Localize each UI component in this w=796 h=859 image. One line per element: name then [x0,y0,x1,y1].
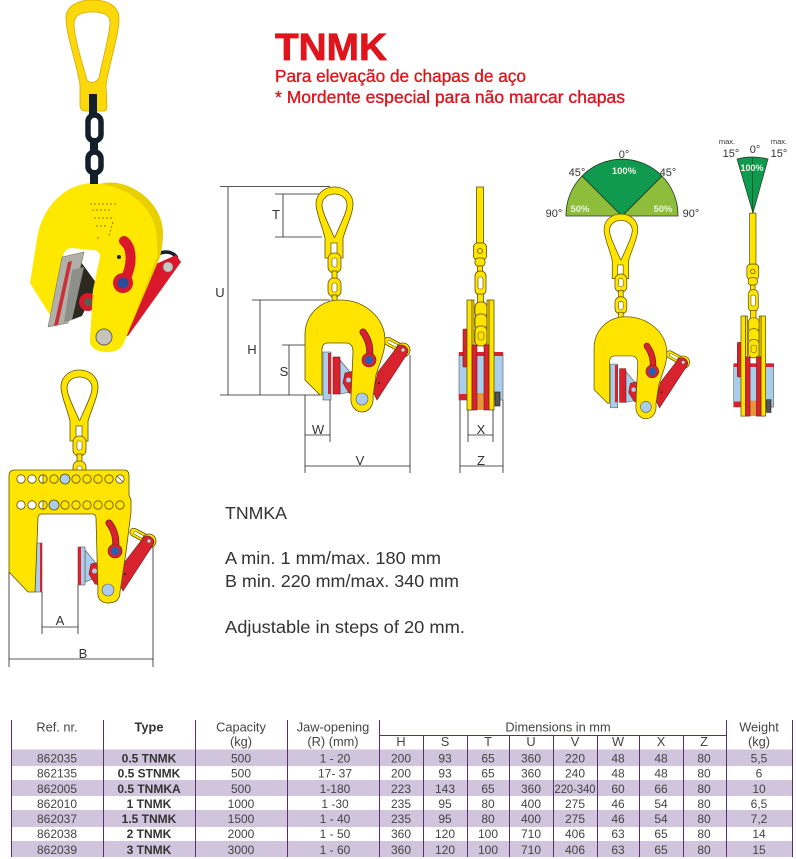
row 862039 [37,843,766,857]
diagram: TNMKA adjustable clamp [9,370,156,667]
table header: H [396,734,406,749]
table header: Weight [739,720,779,734]
row 862037: 275 [565,812,585,826]
row 862010: 1 -30 [321,797,349,811]
table header: Dimensions in mm [505,720,611,734]
table header: S [441,734,449,749]
labels: B [79,646,87,661]
row 862135: 6 [756,766,763,780]
row 862135: 240 [565,766,585,780]
row 862039: 100 [478,843,498,857]
row 862038: 100 [478,827,498,841]
percentages: 50% [570,204,590,215]
rear mechanism [343,336,410,400]
table header: Z [700,734,708,749]
row 862010 [37,797,768,811]
row 862135: 65 [481,766,495,780]
row 862039: 3000 [228,843,255,857]
table header: Ref. nr. [36,720,78,734]
row 862035: 48 [611,752,625,766]
angle labels: 0° [619,149,629,161]
row 862037: 80 [481,812,495,826]
row 862038: 360 [391,827,411,841]
row 862035 [37,752,768,766]
row 862135: 862135 [37,766,77,780]
table header: U [526,734,536,749]
row 862135 [37,766,763,780]
angle labels: 15° [723,148,739,160]
row 862037: 54 [654,812,668,826]
text block: TNMKA specifications: TNMKA [225,503,287,523]
dimension lines: X Z [460,400,503,473]
row 862035: 80 [697,752,711,766]
row 862039: 15 [752,843,766,857]
diagram: dimensioned clamp front view [215,186,410,473]
row 862010: 862010 [37,797,77,811]
labels [215,207,365,468]
labels: X [477,422,486,437]
table header: X [657,734,666,749]
row 862135: 360 [521,766,541,780]
title: TNMK [275,27,388,69]
row 862039: 360 [391,843,411,857]
lever and pin [102,523,122,596]
row 862035: 360 [521,752,541,766]
jaw pads [35,543,95,592]
photo: red arm [122,252,181,336]
table header: (R) (mm) [307,734,359,749]
percentage: 100% [740,163,764,173]
row 862005: 862005 [37,782,77,796]
row stripes [11,750,792,857]
row 862038: 14 [752,827,766,841]
labels: U [215,285,225,300]
row 862038: 2000 [228,827,255,841]
angle labels [719,137,787,160]
dark green sector [582,159,662,216]
row 862005: 60 [611,782,625,796]
labels: W [312,422,325,437]
row 862037: 95 [438,812,452,826]
angle labels: max. [719,137,735,146]
row 862038: 862038 [37,827,77,841]
row 862135: 48 [611,766,625,780]
row 862037: 400 [521,812,541,826]
row 862005: 0.5 TNMKA [117,782,181,796]
photo: chain [88,94,101,184]
row 862039: 1 - 60 [320,843,351,857]
table header: T [484,734,492,749]
row 862035: 500 [231,752,251,766]
adjustable body [9,470,131,603]
row 862037: 7,2 [751,812,768,826]
row 862037: 1 - 40 [320,812,351,826]
photo: shackle [66,0,119,111]
photo: lever and pin [96,241,133,345]
row 862010: 400 [521,797,541,811]
jaw pads [323,352,350,400]
table header: Capacity [216,720,266,734]
row 862005: 500 [231,782,251,796]
row 862010: 1 TNMK [127,797,172,811]
angle labels: 45° [660,167,676,179]
row 862010: 95 [438,797,452,811]
row 862010: 275 [565,797,585,811]
table header: Type [135,720,163,734]
diagram: clamp at angle, side view [734,213,774,416]
row 862135: 80 [697,766,711,780]
text block: TNMKA specifications [225,503,465,637]
rear mechanism [89,527,156,591]
row 862035: 65 [481,752,495,766]
row 862035: 220 [565,752,585,766]
row 862037 [37,812,768,826]
text block: TNMKA specifications: B min. 220 mm/max. 340 mm [225,571,459,591]
text block: TNMKA specifications: Adjustable in steps of 20 mm. [225,617,465,637]
row 862038: 710 [521,827,541,841]
row 862038: 2 TNMK [127,827,172,841]
row 862038 [37,827,766,841]
row 862005: 80 [697,782,711,796]
row 862005: 10 [752,782,766,796]
row 862037: 1500 [228,812,255,826]
row 862035: 93 [438,752,452,766]
row 862010: 235 [391,797,411,811]
shackle and chain [61,370,98,484]
labels: S [280,364,289,379]
row 862037: 1.5 TNMK [122,812,177,826]
photo: steel jaw pads [48,252,104,345]
angle labels [546,149,699,220]
chart: load angle semicircle [546,149,699,220]
green fan [737,157,768,213]
row 862135: 200 [391,766,411,780]
labels: V [356,453,365,468]
angle labels: max. [771,137,787,146]
row 862037: 862037 [37,812,77,826]
chart: side tilt fan [719,137,787,213]
row 862035: 5,5 [751,752,768,766]
text block: TNMKA specifications: A min. 1 mm/max. 180 mm [225,548,441,568]
row 862010: 80 [697,797,711,811]
row 862038: 1 - 50 [320,827,351,841]
labels [56,613,87,661]
angle labels: 45° [569,167,585,179]
row 862037: 80 [697,812,711,826]
row 862010: 6,5 [751,797,768,811]
labels: T [272,207,280,222]
labels: H [247,342,257,357]
row 862039: 120 [435,843,455,857]
percentages: 100% [612,166,637,177]
percentages: 50% [653,204,673,215]
table header [36,720,779,749]
product photo: clamp with shackle and chain [30,0,181,352]
photo: clamp body [30,182,163,352]
row 862005: 360 [521,782,541,796]
dimension lines: U T H S W V [220,186,410,473]
angle labels: 90° [683,208,699,220]
row 862135: 500 [231,766,251,780]
angle labels: 0° [750,144,760,156]
dimension lines: A B [9,545,153,667]
labels: Z [477,453,485,468]
table header: W [612,734,625,749]
row 862039: 65 [654,843,668,857]
clamp body [305,300,385,412]
row 862005: 66 [654,782,668,796]
row 862038: 65 [654,827,668,841]
subtitle line 2: * Mordente especial para não marcar chapas [275,87,625,107]
row 862005: 1-180 [320,782,351,796]
row 862039: 862039 [37,843,77,857]
row 862035: 200 [391,752,411,766]
labels: A [56,613,65,628]
row 862039: 63 [611,843,625,857]
row 862038: 120 [435,827,455,841]
table header: (kg) [748,734,770,749]
adjustment holes [17,474,124,510]
row 862005: 223 [391,782,411,796]
light green sectors [566,176,678,216]
row 862039: 80 [697,843,711,857]
labels [477,422,486,468]
row 862005: 65 [481,782,495,796]
lever and pin [356,332,376,405]
row 862135: 93 [438,766,452,780]
row 862010: 46 [611,797,625,811]
row 862135: 17- 37 [318,766,352,780]
subtitle line 1: Para elevação de chapas de aço [275,66,526,86]
angle labels: 15° [771,148,787,160]
row 862038: 63 [611,827,625,841]
diagram: clamp at angle, front view [594,214,690,419]
table header: (kg) [230,734,252,749]
table header: Jaw-opening [297,720,369,734]
row 862010: 1000 [228,797,255,811]
row 862038: 80 [697,827,711,841]
row 862135: 48 [654,766,668,780]
row 862037: 46 [611,812,625,826]
row 862039: 3 TNMK [127,843,172,857]
table header: V [571,734,580,749]
angle labels: 90° [546,208,562,220]
row 862005 [37,782,766,796]
row 862005: 143 [435,782,455,796]
row 862039: 406 [565,843,585,857]
row 862010: 80 [481,797,495,811]
row 862039: 710 [521,843,541,857]
row 862037: 235 [391,812,411,826]
row 862035: 48 [654,752,668,766]
shackle and chain [316,187,353,301]
row 862135: 0.5 STNMK [118,766,181,780]
row 862010: 54 [654,797,668,811]
row 862005: 220-340 [554,782,596,796]
percentages [570,166,673,215]
row 862035: 1 - 20 [320,752,351,766]
row 862038: 406 [565,827,585,841]
diagram: dimensioned clamp side view [459,187,503,473]
table: TNMK specifications [11,720,792,857]
row 862035: 0.5 TNMK [122,752,177,766]
row 862035: 862035 [37,752,77,766]
